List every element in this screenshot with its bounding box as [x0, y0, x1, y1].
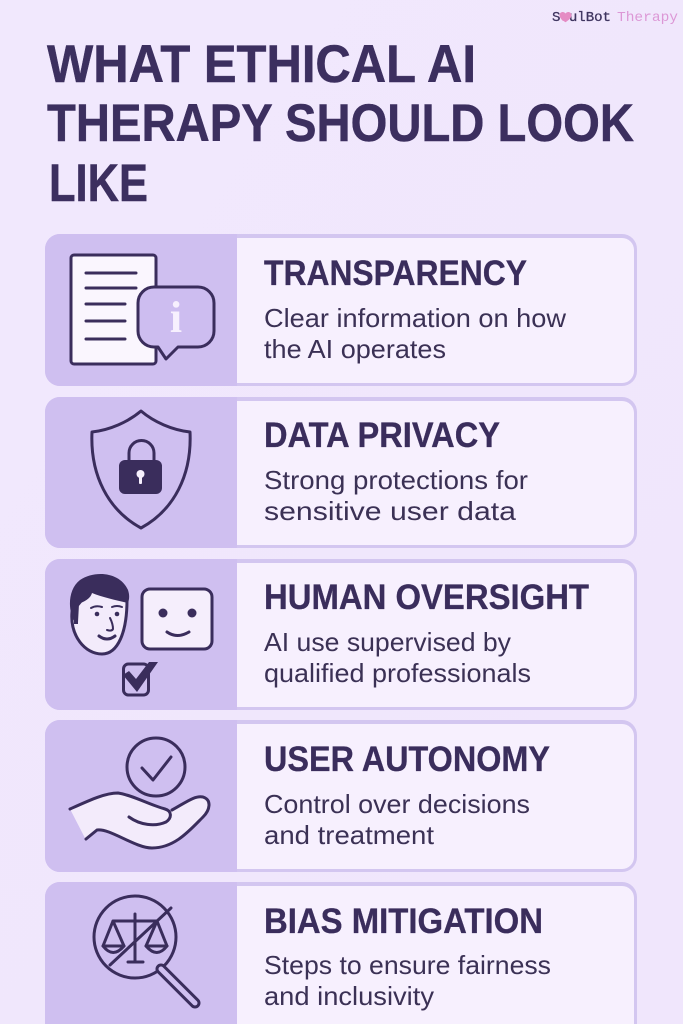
text: bias mitigation: and inclusivity — [264, 981, 434, 1011]
text: data privacy: sensitive user data — [264, 496, 517, 526]
text: bias mitigation — [264, 950, 551, 1011]
text: user autonomy: Control over decisions — [264, 789, 530, 819]
title: LIKE — [49, 154, 148, 213]
text: human oversight: qualified professionals — [264, 658, 531, 688]
text: user autonomy — [264, 789, 530, 850]
text: transparency: the AI operates — [264, 334, 446, 364]
text: data privacy: Strong protections for — [264, 465, 528, 495]
icon: document with info bubble: i — [170, 293, 182, 342]
text: bias mitigation: Steps to ensure fairness — [264, 950, 551, 980]
logo: SoulBot Therapy: SoulBot — [552, 11, 611, 26]
panel: human oversight — [45, 559, 637, 710]
heading: data privacy: DATA PRIVACY — [264, 416, 500, 455]
panel: user autonomy — [45, 720, 637, 872]
panel: bias mitigation — [45, 882, 637, 1024]
text: human oversight — [264, 627, 531, 688]
panel: data privacy — [45, 397, 637, 548]
icon: magnifier with crossed-out scales — [94, 896, 195, 1003]
logo: SoulBot Therapy — [552, 10, 678, 26]
heading: user autonomy: USER AUTONOMY — [264, 740, 550, 779]
heading: transparency: TRANSPARENCY — [264, 254, 527, 293]
heading: human oversight: HUMAN OVERSIGHT — [264, 578, 589, 617]
icon: shield with padlock — [92, 411, 190, 528]
text: data privacy — [264, 465, 528, 526]
icon: document with info bubble — [71, 255, 214, 364]
text: human oversight: AI use supervised by — [264, 627, 511, 657]
logo: SoulBot Therapy: Therapy — [617, 10, 678, 26]
panel: transparency — [45, 234, 637, 386]
text: user autonomy: and treatment — [264, 820, 435, 850]
heading: bias mitigation: BIAS MITIGATION — [264, 902, 543, 941]
text: transparency — [264, 303, 566, 364]
title — [47, 35, 634, 213]
icon: hand holding check — [70, 738, 209, 848]
title: WHAT ETHICAL AI — [47, 35, 476, 94]
icon: human, robot and check — [70, 574, 212, 695]
text: transparency: Clear information on how — [264, 303, 566, 333]
